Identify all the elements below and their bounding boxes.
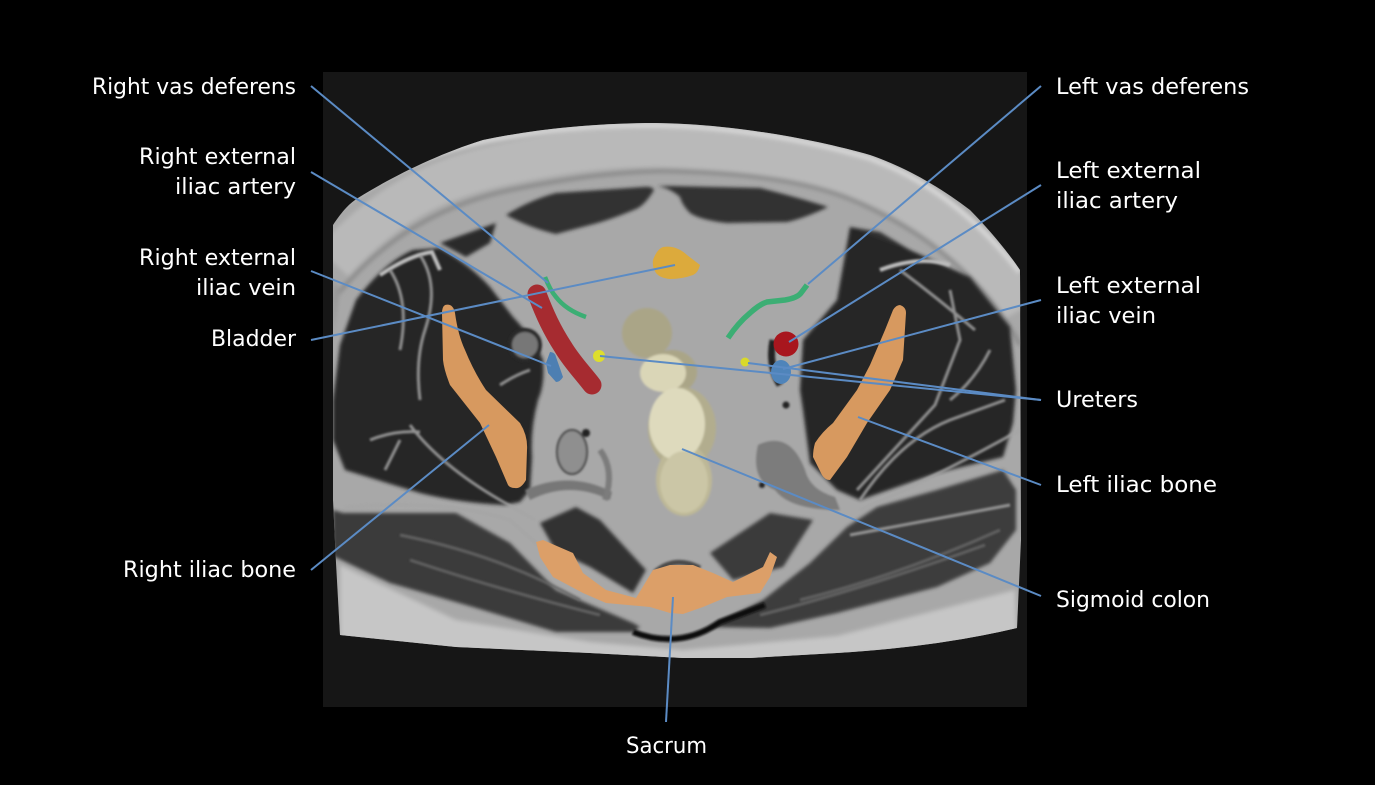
label: right external iliac vein: iliac vein — [196, 276, 296, 301]
right external iliac artery overlay — [537, 294, 592, 385]
label: left iliac bone: Left iliac bone — [1056, 473, 1217, 498]
label: sacrum: Sacrum — [626, 734, 707, 759]
left iliac bone overlay — [813, 305, 906, 480]
right pelvic wall muscles — [800, 227, 1016, 500]
label: right external iliac artery — [139, 145, 296, 200]
label: left external iliac vein — [1056, 274, 1201, 329]
left ureter overlay — [740, 358, 750, 366]
body cross-section — [323, 110, 1027, 670]
left piriformis — [540, 507, 646, 593]
label: right vas deferens: Right vas deferens — [92, 75, 296, 100]
label: left external iliac vein: iliac vein — [1056, 304, 1156, 329]
right gluteal muscle — [710, 470, 1016, 628]
bladder overlay — [653, 247, 700, 279]
label: right external iliac vein: Right external — [139, 246, 296, 271]
right external iliac vein overlay — [546, 352, 563, 382]
left vas deferens overlay — [728, 285, 807, 338]
left pelvic wall muscles — [333, 248, 543, 505]
MRI scan panel — [323, 72, 1027, 707]
central pelvic structures — [510, 330, 840, 639]
label: left external iliac artery: Left external — [1056, 159, 1201, 184]
label: right external iliac artery: iliac artery — [175, 175, 296, 200]
dark vessel rim right — [510, 330, 540, 360]
left external iliac artery overlay — [774, 332, 798, 356]
sigmoid colon overlay — [622, 308, 716, 516]
label: left external iliac vein: Left external — [1056, 274, 1201, 299]
sacrum overlay — [536, 540, 777, 614]
bright fat complex near anterior iliac spine — [380, 252, 950, 275]
label: left external iliac artery: iliac artery — [1056, 189, 1178, 214]
dark bowel gas right — [657, 186, 828, 223]
label: sigmoid colon: Sigmoid colon — [1056, 588, 1210, 613]
label: right external iliac vein — [139, 246, 296, 301]
label: left external iliac artery — [1056, 159, 1201, 214]
leader lines — [311, 86, 1041, 722]
left gluteal muscle — [333, 510, 640, 632]
right ureter overlay — [593, 350, 605, 362]
fat streaks within muscles — [345, 255, 1020, 615]
label: ureters: Ureters — [1056, 388, 1138, 413]
right vas deferens overlay — [545, 277, 586, 317]
dark bowel gas left — [506, 187, 654, 234]
dark vessel rim left — [772, 340, 780, 385]
scan background — [323, 72, 1027, 707]
right piriformis — [710, 513, 813, 580]
left external iliac vein overlay — [771, 360, 791, 384]
label: right iliac bone: Right iliac bone — [123, 558, 296, 583]
label: right external iliac artery: Right external — [139, 145, 296, 170]
label: bladder: Bladder — [211, 327, 297, 352]
right iliac bone overlay — [442, 305, 527, 488]
label: left vas deferens: Left vas deferens — [1056, 75, 1249, 100]
